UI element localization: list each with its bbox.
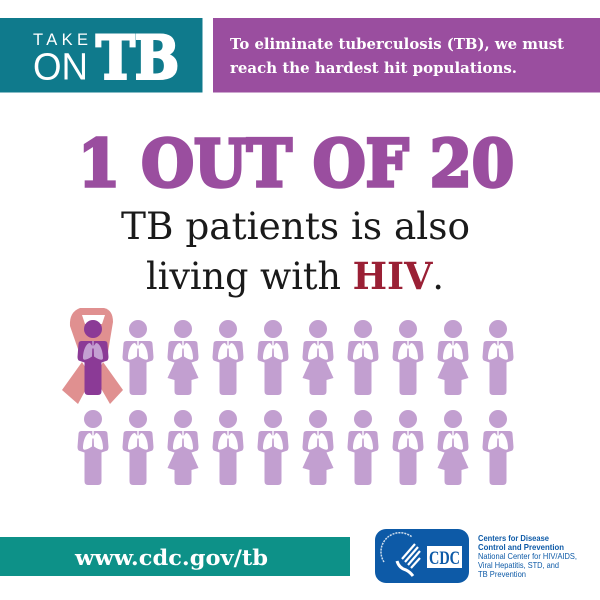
- CDC wordmark box: CDC: [429, 548, 460, 569]
- subheading line 2: living with HIV.: [146, 254, 444, 298]
- agency name text: Viral Hepatitis, STD, and: [478, 560, 559, 570]
- subheading line 1: TB patients is also: [121, 205, 470, 248]
- header: Take on TB logo panel: [0, 18, 202, 94]
- agency name text: TB Prevention: [478, 569, 526, 579]
- logo word: on: ON: [33, 46, 88, 88]
- icon: HHS eagle emblem: [381, 533, 420, 576]
- logo word: take: TAKE: [33, 31, 88, 49]
- statement line 2: reach the hardest hit populations.: [230, 60, 517, 77]
- ribbon loop opening: [82, 315, 105, 324]
- statement line 1: To eliminate tuberculosis (TB), we must: [230, 36, 564, 53]
- pictogram: 20 people, 1 highlighted: [62, 308, 514, 485]
- logo: CDC: [375, 529, 469, 583]
- header: statement panel: [213, 18, 600, 92]
- agency name text: National Center for HIV/AIDS,: [478, 551, 577, 561]
- website address: www.cdc.gov/tb: [74, 545, 268, 570]
- headline statistic: 1 OUT OF 20: [78, 126, 514, 202]
- people: bottom row: [78, 410, 514, 485]
- agency name text: [478, 533, 577, 579]
- agency name text: Centers for Disease: [478, 533, 549, 543]
- icon: awareness ribbon: [62, 308, 123, 404]
- logo word: TB: TB: [96, 24, 179, 94]
- highlighted person: [78, 320, 108, 395]
- people: top row: [122, 320, 514, 395]
- agency name text: Control and Prevention: [478, 542, 564, 552]
- footer: website banner: [0, 537, 350, 576]
